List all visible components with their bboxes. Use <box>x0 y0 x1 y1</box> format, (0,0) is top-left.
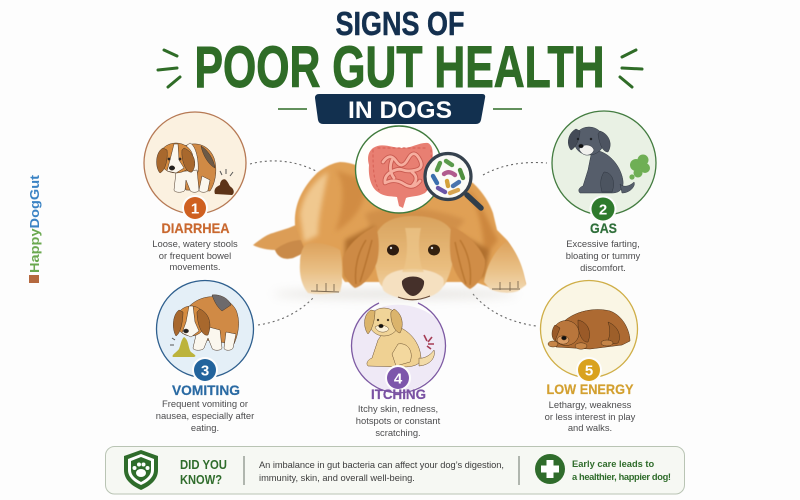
panel: diarrhea <box>144 112 246 272</box>
description: Excessive farting, <box>566 238 640 249</box>
dog body <box>295 162 526 292</box>
heading: DIARRHEA <box>162 220 230 236</box>
icon: grey dog <box>568 127 634 193</box>
icon: sick beagle <box>157 143 216 192</box>
icon: tired brown dog <box>548 310 630 349</box>
description <box>152 238 238 272</box>
icon: magnifier with bacteria <box>425 154 481 208</box>
large intestine <box>368 143 433 208</box>
description <box>156 398 254 433</box>
panel: gas <box>552 111 656 273</box>
description: or less interest in play <box>545 411 636 422</box>
connector dashes <box>250 161 547 326</box>
icon: poop <box>215 169 234 195</box>
description: Itchy skin, redness, <box>358 403 438 414</box>
head <box>375 216 454 300</box>
icon: vomiting beagle <box>173 295 239 350</box>
panel: gut illustration <box>356 126 442 213</box>
panel: itching <box>351 303 446 438</box>
icon: left sparks <box>158 50 180 87</box>
title: signs of: SIGNS OF <box>336 5 464 42</box>
panel: low energy <box>540 280 638 433</box>
panel: did you know bar <box>106 446 684 494</box>
description: nausea, especially after <box>156 410 254 421</box>
description: Frequent vomiting or <box>162 398 248 409</box>
left leg <box>300 243 342 294</box>
number badge 1 <box>182 195 208 221</box>
description: bloating or tummy <box>566 250 641 261</box>
heading: VOMITING <box>172 382 240 398</box>
description: movements. <box>169 261 221 272</box>
small intestine <box>373 148 431 190</box>
right leg <box>484 241 526 293</box>
description: discomfort. <box>580 262 626 273</box>
description: Loose, watery stools <box>152 238 238 249</box>
did you know heading: DID YOU <box>180 458 227 472</box>
number badge 2: 2 <box>599 202 607 218</box>
icon: itch marks <box>424 335 434 349</box>
description <box>566 238 641 273</box>
description: Lethargy, weakness <box>549 399 632 410</box>
description: or frequent bowel <box>159 250 231 261</box>
description: eating. <box>191 422 219 433</box>
tail <box>253 224 310 259</box>
subtitle badge: in dogs: IN DOGS <box>348 97 452 124</box>
early care text <box>572 459 671 482</box>
title: poor gut health: POOR GUT HEALTH <box>194 35 604 100</box>
did you know heading: KNOW? <box>180 473 222 487</box>
early care text: a healthier, happier dog! <box>572 472 671 482</box>
forehead blaze <box>402 228 424 272</box>
early care text: Early care leads to <box>572 459 654 469</box>
icon: right sparks <box>620 50 642 87</box>
number badge 5: 5 <box>585 362 593 380</box>
did you know text: An imbalance in gut bacteria can affect your dog’s digestion, <box>259 460 504 470</box>
muzzle <box>382 269 444 299</box>
body fur shading <box>300 170 498 278</box>
description <box>545 399 636 433</box>
icon: gas cloud <box>629 154 650 180</box>
main golden retriever photo <box>253 162 526 300</box>
did you know heading <box>180 458 227 487</box>
right ear <box>450 226 485 289</box>
subtitle badge: in dogs <box>278 94 522 124</box>
left ear <box>343 226 379 288</box>
heading: LOW ENERGY <box>546 381 634 397</box>
heading: ITCHING <box>371 386 426 402</box>
dog eyes, nose, paws <box>311 244 520 300</box>
icon: vomit puddle <box>170 337 195 357</box>
description: and walks. <box>568 422 612 433</box>
number badge 1: 1 <box>191 200 199 218</box>
icon: scratching puppy <box>365 308 434 367</box>
description <box>356 403 441 438</box>
number badge 2 <box>590 196 616 222</box>
description: scratching. <box>375 427 421 438</box>
number badge 4: 4 <box>394 370 403 388</box>
number badge 3 <box>192 357 218 383</box>
number badge 5 <box>576 357 602 383</box>
panel: vomiting <box>156 280 254 433</box>
brand: vertical logo: HappyDogGut <box>28 174 42 273</box>
heading: GAS <box>590 220 617 236</box>
icon: green cross <box>535 454 565 484</box>
number badge 3: 3 <box>201 362 209 380</box>
did you know text: immunity, skin, and overall well-being. <box>259 473 415 483</box>
description: hotspots or constant <box>356 415 441 426</box>
did you know text <box>259 460 504 483</box>
icon: paw shield <box>124 450 158 490</box>
